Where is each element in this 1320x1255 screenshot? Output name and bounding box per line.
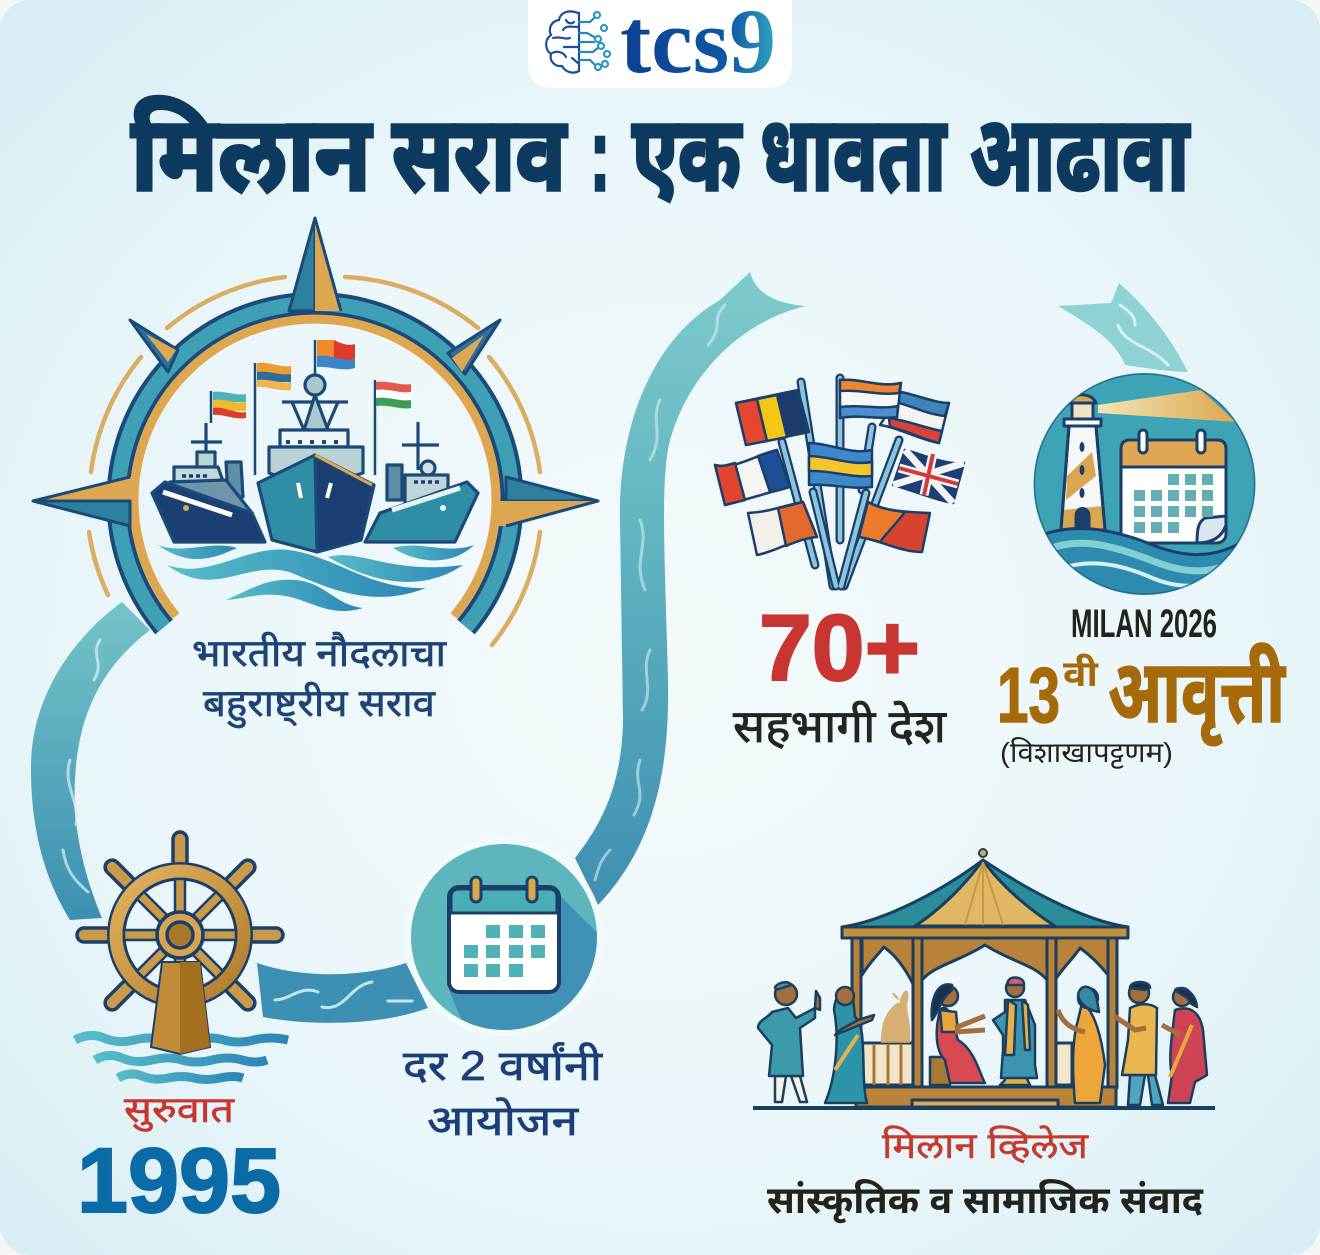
text: Indian Navy multilateral exercise	[192, 631, 447, 729]
person: woman in red saree	[1162, 988, 1207, 1103]
text: held every two years	[403, 1042, 603, 1144]
text: Indian Navy multilateral exercise: बहुराष्ट्रीय सराव	[203, 681, 436, 729]
person: seated woman	[930, 984, 985, 1085]
title: एक	[632, 97, 742, 213]
background figure	[881, 991, 910, 1043]
person: man with teal kurta	[758, 982, 820, 1102]
pavilion structure	[842, 849, 1128, 1107]
text: Milan Village	[767, 1125, 1204, 1224]
text: Indian Navy multilateral exercise: भारतीय नौदलाचा	[192, 631, 447, 675]
sea waves	[158, 545, 474, 611]
logo: tcs9	[528, 0, 792, 92]
text: start 1995: 1995	[77, 1130, 281, 1232]
icon: compass with ships	[33, 218, 598, 645]
wheel waves	[75, 1035, 288, 1080]
stat: 70+ countries	[733, 595, 947, 752]
ground line	[753, 1106, 1215, 1110]
arrow: ribbon to lighthouse	[1058, 283, 1188, 372]
front flag poles	[813, 492, 866, 586]
icon: calendar badge	[411, 844, 598, 1030]
person: woman with blue saree	[825, 987, 874, 1103]
stat: 70+ countries: सहभागी देश	[733, 699, 947, 752]
wheel pedestal	[151, 962, 210, 1054]
compass points	[33, 218, 598, 526]
text: held every two years: दर 2 वर्षांनी	[403, 1042, 603, 1089]
title: मिलान	[131, 96, 373, 213]
right ship	[365, 422, 478, 542]
lighthouse sea	[1046, 527, 1238, 594]
text: Milan 2026 13th edition: (विशाखापट्टणम)	[1000, 736, 1173, 769]
icon: flags bundle	[715, 378, 964, 586]
text: Milan 2026 13th edition: MILAN 2026	[1071, 602, 1217, 646]
arrow: ribbon from compass to wheel	[31, 602, 150, 920]
left ship	[152, 423, 265, 542]
title	[131, 96, 1191, 213]
text: held every two years: आयोजन	[427, 1097, 579, 1144]
stat: 70+ countries: 70+	[759, 595, 920, 700]
title: :	[590, 97, 610, 213]
person: man with turban	[993, 978, 1037, 1085]
title: धावता	[760, 97, 948, 213]
icon: ship wheel	[75, 832, 288, 1080]
people	[758, 978, 1207, 1105]
lighthouse	[1061, 382, 1105, 530]
compass ring	[89, 277, 540, 645]
illustration: Milan Village pavilion	[753, 849, 1215, 1108]
arrow: ribbon from calendar to flags	[575, 272, 806, 905]
wheel handles	[77, 832, 283, 1038]
icon: lighthouse and calendar	[1030, 373, 1260, 600]
flags on ships	[211, 340, 411, 475]
title: सराव	[392, 97, 568, 213]
arrow: ribbon from wheel to calendar	[257, 963, 428, 1023]
text: start 1995: सुरुवात	[124, 1089, 236, 1132]
calendar on lighthouse badge	[1121, 430, 1226, 543]
person: woman with orange saree	[1058, 987, 1105, 1103]
text: Milan Village: मिलान व्हिलेज	[882, 1125, 1089, 1166]
person: man in yellow kurta	[1114, 982, 1163, 1105]
text: Milan 2026 13th edition	[997, 602, 1287, 769]
back flag poles	[782, 378, 899, 586]
text: Milan Village: सांस्कृतिक व सामाजिक संवाद	[767, 1178, 1204, 1224]
title: आढावा	[970, 97, 1191, 213]
centre ship	[258, 375, 374, 552]
icon: brain circuit	[546, 11, 610, 73]
text: Milan 2026 13th edition: वी	[1063, 653, 1100, 694]
text: Milan 2026 13th edition: 13	[997, 651, 1060, 739]
